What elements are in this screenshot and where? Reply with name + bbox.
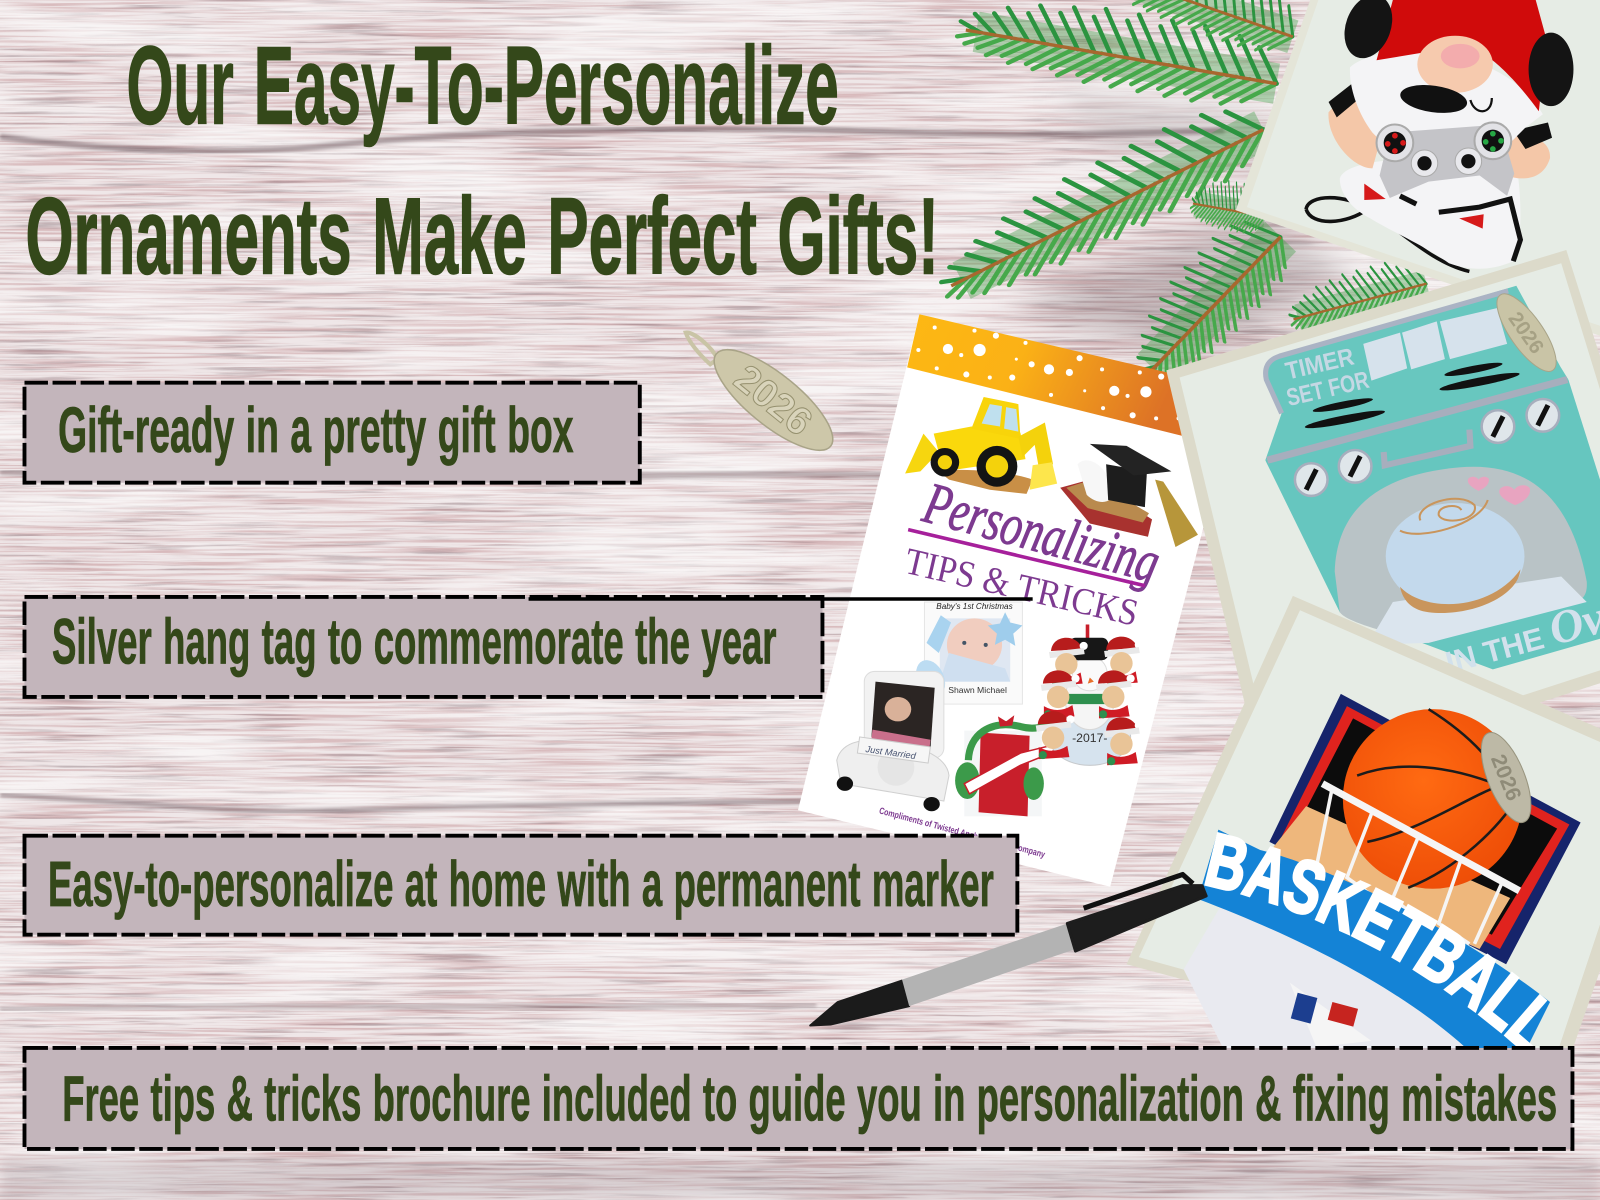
- box liner: [1247, 0, 1600, 337]
- silver year tag: [1471, 726, 1541, 829]
- pine branches: [924, 0, 1432, 399]
- callout: brochure: [24, 1048, 1572, 1149]
- red door ornament: [955, 715, 1061, 816]
- jeep just married ornament: Just Married: [864, 744, 917, 761]
- graduation cap ornament: [1060, 444, 1198, 547]
- orange header band with dots: [907, 314, 1194, 439]
- backhoe ornament: [905, 397, 1057, 494]
- silver year tag: 2026: [1486, 751, 1526, 804]
- baby frame ornament: Baby's 1st Christmas: [936, 602, 1013, 611]
- purple script heading: Personalizing: [916, 469, 1167, 595]
- silver year tag: 2026: [1504, 308, 1548, 358]
- timer set for text: [1283, 343, 1372, 412]
- jeep just married ornament: [837, 671, 949, 811]
- basketball banner text: [1202, 884, 1531, 1057]
- brochure footer credit: Compliments of Twisted Anchor Trading Company: [878, 806, 1047, 860]
- box rim: [1127, 596, 1600, 1082]
- baby frame ornament: [910, 602, 1022, 704]
- callout: gift box: [24, 383, 640, 483]
- callout: hang tag: [24, 597, 1033, 697]
- snowman family ornament: -2017-: [1072, 731, 1107, 745]
- timer set for text: TIMER: [1283, 343, 1357, 385]
- baby frame ornament: Shawn Michael: [948, 685, 1007, 695]
- callout: permanent marker: [24, 836, 1017, 935]
- silver year tag: [1487, 286, 1566, 380]
- box rim: [1166, 250, 1600, 791]
- box liner: [1139, 610, 1600, 1071]
- timer set for text: SET FOR: [1284, 367, 1372, 412]
- gift box: gnome ornament: [1236, 0, 1600, 347]
- loose silver 2026 hang tag: [686, 333, 847, 466]
- brochure: Personalizing Tips & Tricks: [798, 314, 1239, 887]
- title line 2: Ornaments Make Perfect Gifts!: [26, 175, 939, 296]
- purple underline: [908, 530, 1145, 586]
- basketball ornament: [1184, 694, 1581, 1048]
- permanent marker: [810, 874, 1206, 1026]
- box liner: [1180, 263, 1600, 776]
- loose silver 2026 hang tag: 2026: [726, 357, 820, 444]
- box rim: [1236, 0, 1600, 347]
- callout: hang tag: Silver hang tag to commemorate the year: [52, 605, 777, 677]
- gift box: basketball ornament: [1126, 596, 1600, 1048]
- basketball ornament: BASKETBALL: [1204, 832, 1548, 1046]
- callout: gift box: Gift-ready in a pretty gift box: [58, 394, 574, 466]
- cinnamon roll oven ornament: [1265, 286, 1600, 684]
- snowman family ornament: [1036, 624, 1143, 765]
- brochure page: [798, 314, 1239, 887]
- gift box: oven ornament: [1166, 250, 1600, 791]
- tips and tricks subtitle: TIPS & TRICKS: [901, 540, 1142, 635]
- title line 1: Our Easy-To-Personalize: [127, 24, 839, 147]
- gnome gamer ornament: [1306, 0, 1573, 271]
